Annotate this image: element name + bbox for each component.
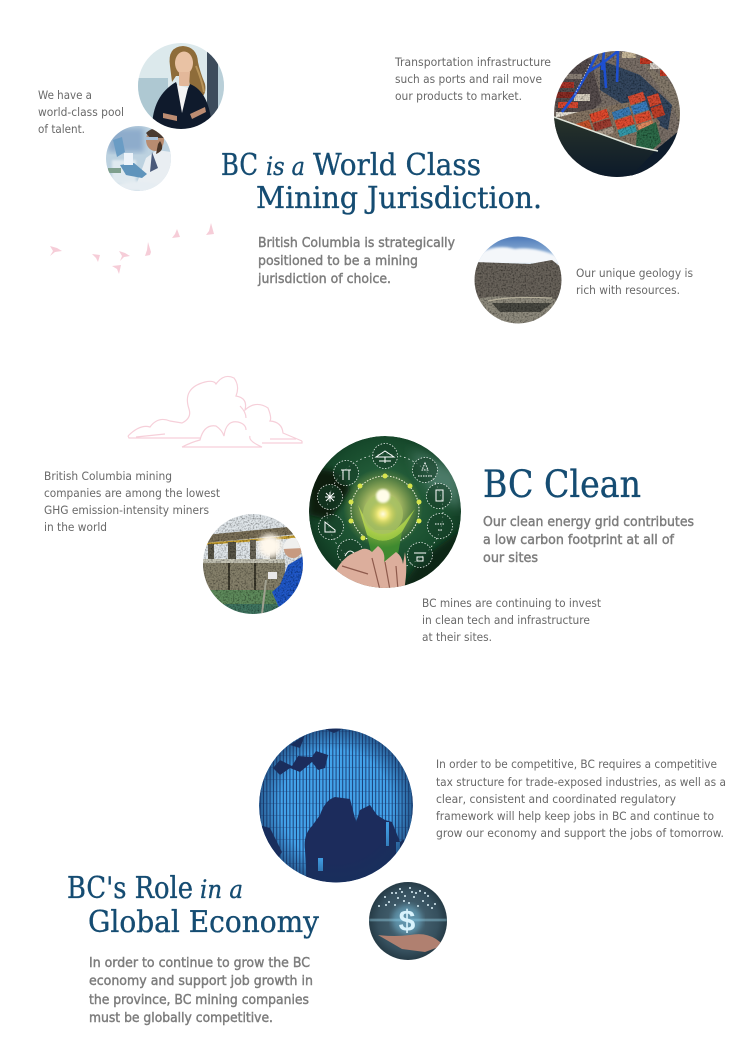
caption: transportation: such as ports and rail move xyxy=(395,72,542,86)
heading: BC is a World Class Mining Jurisdiction: is a xyxy=(266,152,305,181)
heading: BC's Role in a Global Economy: in a xyxy=(200,875,243,904)
photo: container ship at port xyxy=(554,51,680,177)
caption: geology: rich with resources. xyxy=(576,283,680,297)
caption: talent: We have a xyxy=(38,88,92,102)
caption: clean tech: in clean tech and infrastructure xyxy=(422,613,590,627)
heading: BC is a World Class Mining Jurisdiction: Mining Jurisdiction. xyxy=(256,181,542,216)
intro text: globally competitive: In order to continue to grow the BC xyxy=(89,956,310,971)
photo: light bulb in hand xyxy=(309,436,461,590)
intro text: clean energy grid: our sites xyxy=(483,551,538,566)
heading: BC is a World Class Mining Jurisdiction: World Class xyxy=(313,148,481,183)
caption: competitive tax structure: framework will help keep jobs in BC and continue to xyxy=(436,809,714,823)
intro text: globally competitive: economy and support job growth in xyxy=(89,974,313,989)
section: BC's Role in a Global Economy xyxy=(67,726,726,1026)
photo: worker at dam xyxy=(203,514,303,614)
heading: BC's Role in a Global Economy: Global Economy xyxy=(88,905,319,940)
heading: BC is a World Class Mining Jurisdiction: BC xyxy=(221,148,258,183)
caption: GHG intensity: GHG emission-intensity miners xyxy=(44,503,209,517)
photo: lab scientist xyxy=(106,126,171,191)
intro text: globally competitive: the province, BC mining companies xyxy=(89,993,309,1008)
caption: GHG intensity: companies are among the lowest xyxy=(44,486,220,500)
caption: clean tech: at their sites. xyxy=(422,630,492,644)
intro text: strategic position: positioned to be a mining xyxy=(258,254,418,269)
caption: transportation: our products to market. xyxy=(395,89,522,103)
intro text: clean energy grid: a low carbon footprint at all of xyxy=(483,533,674,548)
caption: clean tech: BC mines are continuing to invest xyxy=(422,596,601,610)
caption: transportation: Transportation infrastructure xyxy=(394,55,551,69)
illustration: flock of birds xyxy=(50,223,214,274)
intro text: strategic position: jurisdiction of choice. xyxy=(257,272,391,287)
caption: geology: Our unique geology is xyxy=(576,266,693,280)
caption: talent: world-class pool xyxy=(38,105,124,119)
caption: talent: of talent. xyxy=(38,122,85,136)
section: BC is a World Class Mining Jurisdiction xyxy=(38,43,693,324)
heading: BC's Role in a Global Economy xyxy=(67,871,319,940)
heading: BC is a World Class Mining Jurisdiction xyxy=(221,148,542,216)
intro text: strategic position: British Columbia is strategically xyxy=(258,236,455,251)
photo: dollar sign over hand xyxy=(369,882,447,960)
caption: competitive tax structure: tax structure for trade-exposed industries, as well as a xyxy=(436,775,726,789)
photo: businesswoman xyxy=(138,43,225,129)
heading: BC Clean: BC Clean xyxy=(483,463,641,506)
intro text: clean energy grid: Our clean energy grid contributes xyxy=(483,515,694,530)
caption: competitive tax structure: clear, consistent and coordinated regulatory xyxy=(436,792,676,806)
heading: BC's Role in a Global Economy: BC's Role xyxy=(67,871,193,906)
caption: GHG intensity: in the world xyxy=(44,520,107,534)
photo: open pit mine xyxy=(474,236,562,324)
illustration: cloud outline xyxy=(128,376,302,447)
caption: competitive tax structure: grow our economy and support the jobs of tomorrow. xyxy=(436,826,724,840)
caption: competitive tax structure: In order to be competitive, BC requires a competitive xyxy=(436,757,717,771)
caption: GHG intensity: British Columbia mining xyxy=(44,469,172,483)
photo: digital globe xyxy=(259,726,416,884)
intro text: globally competitive: must be globally competitive. xyxy=(89,1011,273,1026)
icon: dollar symbol: $ xyxy=(399,905,416,938)
section: BC Clean xyxy=(44,376,694,644)
